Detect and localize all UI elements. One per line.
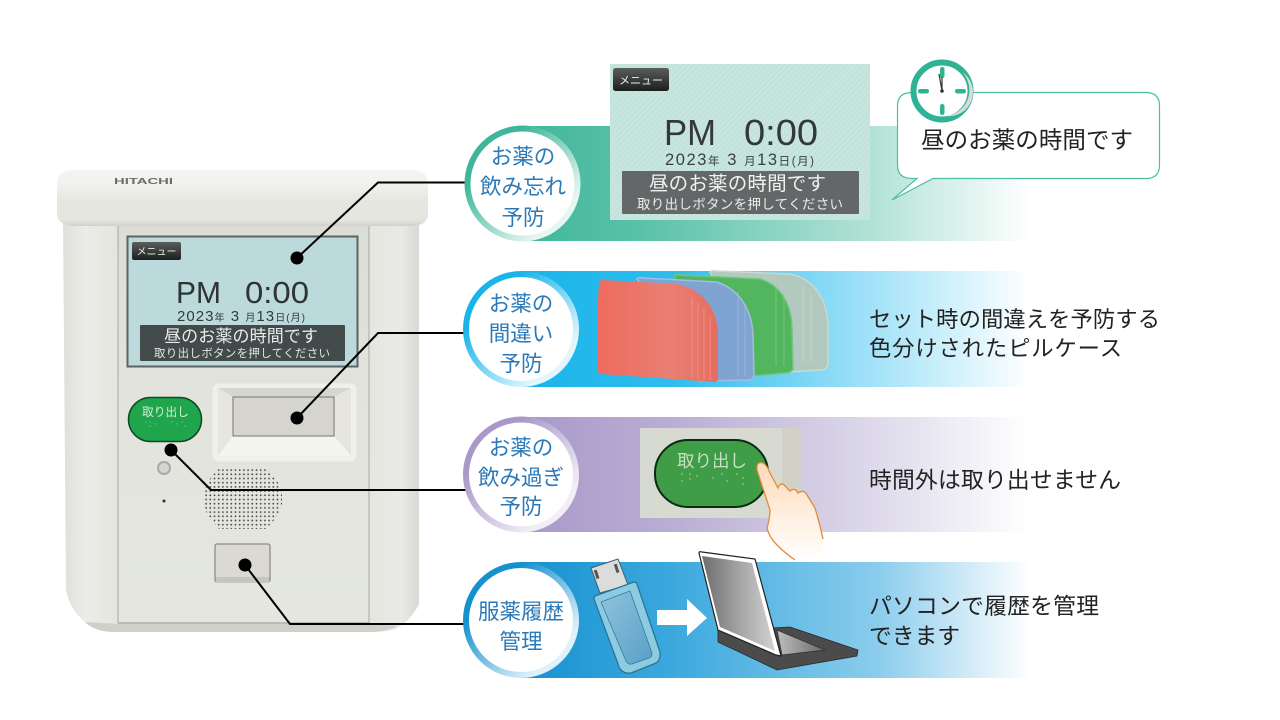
enlarged status bar: 取り出しボタンを押してください (637, 197, 843, 212)
pill cases (597, 271, 828, 382)
bubble message: 昼のお薬の時間です (921, 127, 1133, 153)
description: pill cases (869, 307, 1160, 361)
device screen (128, 236, 358, 366)
indicator LED (157, 461, 171, 475)
device top cap (57, 170, 428, 226)
badge: mistake prevention: お薬の (489, 292, 553, 316)
badge: medication history: 管理 (499, 630, 543, 654)
leader line 4 (238, 558, 466, 624)
pill tray slot (212, 383, 357, 462)
status bar: 昼のお薬の時間です (164, 327, 318, 346)
badge: overdose prevention: 予防 (499, 495, 543, 519)
photo button label: 取り出し (677, 451, 747, 471)
badge: mistake prevention: 予防 (499, 352, 543, 376)
hand outline (757, 463, 823, 560)
icon: pointing hand (757, 463, 823, 560)
clock time (176, 275, 309, 310)
USB port cover (215, 544, 270, 583)
status bar (140, 325, 345, 361)
clear pill case (710, 271, 828, 374)
description: history on PC: パソコンで履歴を管理 (869, 593, 1099, 619)
badge: overdose prevention: お薬の (489, 436, 553, 460)
clock time: PM (176, 275, 221, 310)
leader line 3 (164, 444, 466, 490)
leader line 2 (290, 333, 466, 424)
enlarged time (664, 112, 818, 153)
description: pill cases: セット時の間違えを予防する (869, 307, 1160, 332)
red pill case (597, 280, 718, 382)
take-out button photo (640, 428, 802, 518)
green pill case (674, 275, 793, 379)
microphone hole (162, 500, 166, 502)
badge: medication history: 服薬履歴 (478, 600, 564, 624)
band 4 background (520, 562, 1030, 678)
description: history on PC (869, 593, 1099, 649)
device front panel (118, 226, 369, 623)
enlarged status bar: 昼のお薬の時間です (649, 173, 826, 195)
brand logo: HITACHI (114, 177, 173, 186)
menu button: メニュー (136, 247, 176, 258)
take-out button: 取り出し (142, 406, 189, 419)
speaker grille (203, 468, 282, 529)
band 2 background (520, 271, 1030, 387)
enlarged menu button (613, 68, 669, 91)
enlarged date: 2023年 3 月13日(月) (665, 151, 814, 169)
photo green button (655, 440, 768, 507)
blue pill case (637, 278, 754, 381)
enlarged time: PM (664, 112, 716, 153)
screen enlargement (610, 64, 870, 220)
badge: mistake prevention (466, 274, 576, 384)
description: locked outside hours: 時間外は取り出せません (869, 467, 1121, 493)
band 1 background (520, 126, 1030, 241)
enlarged time: 0:00 (744, 112, 818, 153)
description: pill cases: 色分けされたピルケース (869, 336, 1122, 361)
clock time: 0:00 (245, 275, 309, 310)
enlarged status bar (622, 171, 859, 214)
badge: missed dose prevention: 予防 (501, 206, 545, 230)
arrow (657, 599, 707, 636)
badge: overdose prevention: 飲み過ぎ (478, 466, 564, 490)
badge: missed dose prevention: 飲み忘れ (480, 175, 566, 199)
badge: mistake prevention: 間違い (489, 322, 553, 346)
date: 2023年 3 月13日(月) (177, 308, 305, 325)
band 3 background (520, 417, 1030, 532)
badge: medication history (466, 565, 576, 675)
status bar: 取り出しボタンを押してください (154, 346, 330, 360)
badge: missed dose prevention (468, 128, 578, 238)
device body (63, 215, 419, 632)
device: medication dispenser (57, 170, 428, 632)
description: history on PC: できます (869, 623, 960, 649)
badge: missed dose prevention: お薬の (491, 145, 555, 169)
badge: overdose prevention (466, 420, 576, 530)
enlarged menu button: メニュー (619, 75, 663, 87)
icon: clock (914, 62, 973, 120)
leader line 1 (290, 182, 466, 264)
menu button (132, 242, 181, 260)
take-out button (128, 398, 202, 442)
icon: laptop (699, 552, 858, 670)
icon: USB memory (591, 559, 660, 673)
speech bubble (892, 92, 1160, 200)
